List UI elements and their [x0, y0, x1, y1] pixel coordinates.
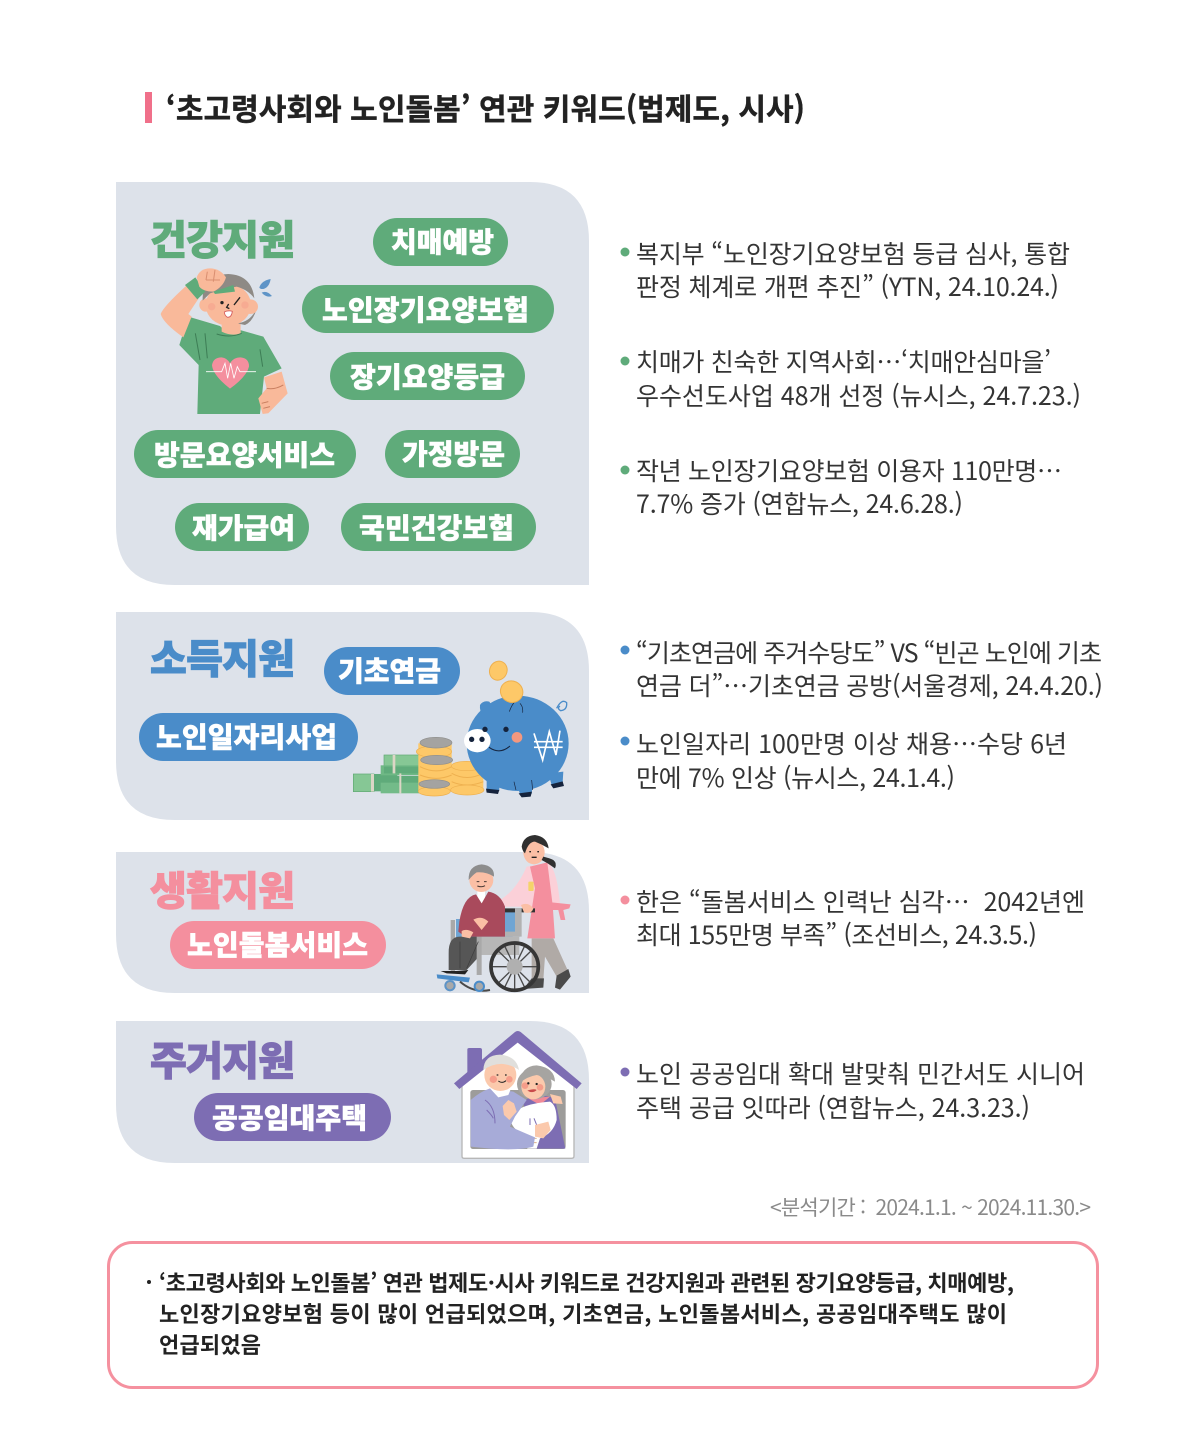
news list: 소득지원 — [620, 634, 1103, 795]
callout: summary: 노인장기요양보험 등이 많이 언급되었으며, 기초연금, 노인돌봄서비스, 공공임대주택도 많이 — [159, 1297, 1007, 1329]
keyword: 재가급여: 재가급여 — [192, 507, 295, 547]
callout: summary — [108, 1242, 1098, 1388]
analysis period note: <분석기간 : 2024.1.1. ~ 2024.11.30.> — [770, 1192, 1091, 1222]
panel: 생활지원 — [116, 835, 1085, 993]
keyword: 기초연금 — [324, 647, 460, 695]
panel: 소득지원 — [116, 612, 1103, 820]
news list: 건강지원: 치매가 친숙한 지역사회…‘치매안심마을’ — [636, 343, 1051, 379]
keyword: 가정방문: 가정방문 — [402, 433, 505, 473]
keyword: 장기요양등급 — [330, 352, 525, 400]
callout: summary: 언급되었음 — [159, 1328, 261, 1360]
icon: piggy bank with coins and cash — [353, 658, 569, 797]
news list: 소득지원: 연금 더”…기초연금 공방(서울경제, 24.4.20.) — [636, 667, 1103, 703]
news list: 소득지원: 만에 7% 인상 (뉴시스, 24.1.4.) — [636, 759, 955, 795]
keyword: 국민건강보험: 국민건강보험 — [359, 507, 514, 547]
news list: 주거지원: 노인 공공임대 확대 발맞춰 민간서도 시니어 — [636, 1055, 1085, 1091]
heading: 생활지원: 생활지원 — [150, 859, 295, 917]
keyword: 방문요양서비스 — [134, 430, 356, 478]
keyword: 노인돌봄서비스: 노인돌봄서비스 — [187, 924, 368, 964]
keyword: 치매예방 — [373, 218, 508, 266]
keyword: 노인일자리사업 — [139, 713, 358, 761]
keyword: 노인돌봄서비스 — [170, 921, 386, 969]
news list: 건강지원: 복지부 “노인장기요양보험 등급 심사, 통합 — [636, 235, 1070, 271]
title: ‘초고령사회와 노인돌봄’ 연관 키워드(법제도, 시사) — [166, 85, 805, 129]
news list: 건강지원: 7.7% 증가 (연합뉴스, 24.6.28.) — [636, 485, 963, 521]
callout: summary: ‘초고령사회와 노인돌봄’ 연관 법제도·시사 키워드로 건강지원과 관련된 장기요양등급, 치매예방, — [159, 1266, 1014, 1298]
keyword: 재가급여 — [175, 503, 309, 551]
keyword: 치매예방: 치매예방 — [391, 221, 494, 261]
heading: 건강지원: 건강지원 — [150, 208, 295, 266]
keyword: 공공임대주택 — [194, 1093, 391, 1141]
keyword: 장기요양등급: 장기요양등급 — [350, 356, 505, 396]
news list: 건강지원: 작년 노인장기요양보험 이용자 110만명… — [636, 452, 1062, 488]
news list: 주거지원: 주택 공급 잇따라 (연합뉴스, 24.3.23.) — [636, 1089, 1030, 1125]
news list: 생활지원 — [620, 883, 1085, 952]
keyword: 노인장기요양보험 — [302, 285, 554, 333]
news list: 소득지원: 노인일자리 100만명 이상 채용…수당 6년 — [636, 725, 1067, 761]
news list: 건강지원: 우수선도사업 48개 선정 (뉴시스, 24.7.23.) — [636, 377, 1081, 413]
keyword: 노인일자리사업: 노인일자리사업 — [156, 716, 337, 756]
keyword: 기초연금: 기초연금 — [338, 650, 441, 690]
news list: 건강지원 — [620, 235, 1081, 521]
keyword: 노인장기요양보험: 노인장기요양보험 — [322, 289, 529, 329]
news list: 건강지원: 판정 체계로 개편 추진” (YTN, 24.10.24.) — [636, 268, 1059, 304]
keyword: 가정방문 — [385, 430, 520, 478]
heading: 주거지원: 주거지원 — [150, 1029, 295, 1087]
panel: 건강지원 — [116, 182, 1081, 585]
keyword: 공공임대주택: 공공임대주택 — [212, 1097, 367, 1137]
news list: 소득지원: “기초연금에 주거수당도” VS “빈곤 노인에 기초 — [636, 634, 1102, 670]
news list: 생활지원: 한은 “돌봄서비스 인력난 심각… 2042년엔 — [636, 883, 1085, 919]
news list: 생활지원: 최대 155만명 부족” (조선비스, 24.3.5.) — [636, 916, 1037, 952]
icon: elderly couple hugging in a house — [454, 1031, 582, 1158]
heading: 소득지원: 소득지원 — [150, 627, 295, 685]
keyword: 방문요양서비스: 방문요양서비스 — [154, 434, 335, 474]
keyword: 국민건강보험 — [341, 503, 536, 551]
icon: elderly man exercising with heart shirt — [161, 268, 288, 414]
panel: 주거지원 — [116, 1021, 1085, 1163]
icon: caregiver pushing elderly person in wheelchair — [437, 835, 571, 991]
news list: 주거지원 — [620, 1055, 1085, 1125]
